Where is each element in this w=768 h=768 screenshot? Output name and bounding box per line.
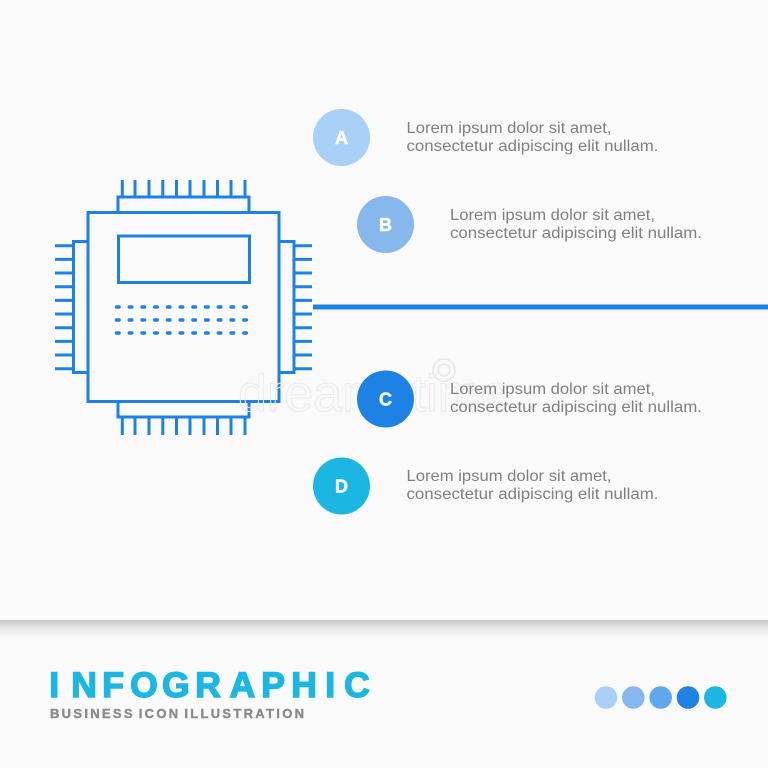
step C: consectetur adipiscing elit nullam.	[450, 399, 702, 416]
watermark: dreamstime	[238, 365, 510, 423]
step B	[357, 196, 702, 253]
step D: consectetur adipiscing elit nullam.	[406, 486, 658, 503]
step B: B	[379, 215, 392, 235]
step C	[357, 370, 702, 428]
connector line	[313, 304, 768, 310]
step B: Lorem ipsum dolor sit amet,	[450, 207, 655, 224]
subtitle: BUSINESS ICON ILLUSTRATION	[50, 706, 304, 721]
step A: A	[335, 128, 348, 148]
step D	[313, 458, 658, 514]
step C: C	[379, 390, 392, 410]
title: INFOGRAPHIC	[49, 665, 370, 705]
step C: Lorem ipsum dolor sit amet,	[450, 381, 655, 398]
step D: D	[335, 476, 348, 496]
footer colour dots	[595, 686, 727, 709]
step A: Lorem ipsum dolor sit amet,	[406, 120, 612, 137]
footer shadow band	[0, 620, 768, 637]
step B: consectetur adipiscing elit nullam.	[450, 225, 702, 242]
step D: Lorem ipsum dolor sit amet,	[406, 468, 612, 485]
step A: consectetur adipiscing elit nullam.	[406, 138, 658, 155]
icon: processor chip	[55, 180, 312, 435]
step A	[313, 109, 658, 166]
